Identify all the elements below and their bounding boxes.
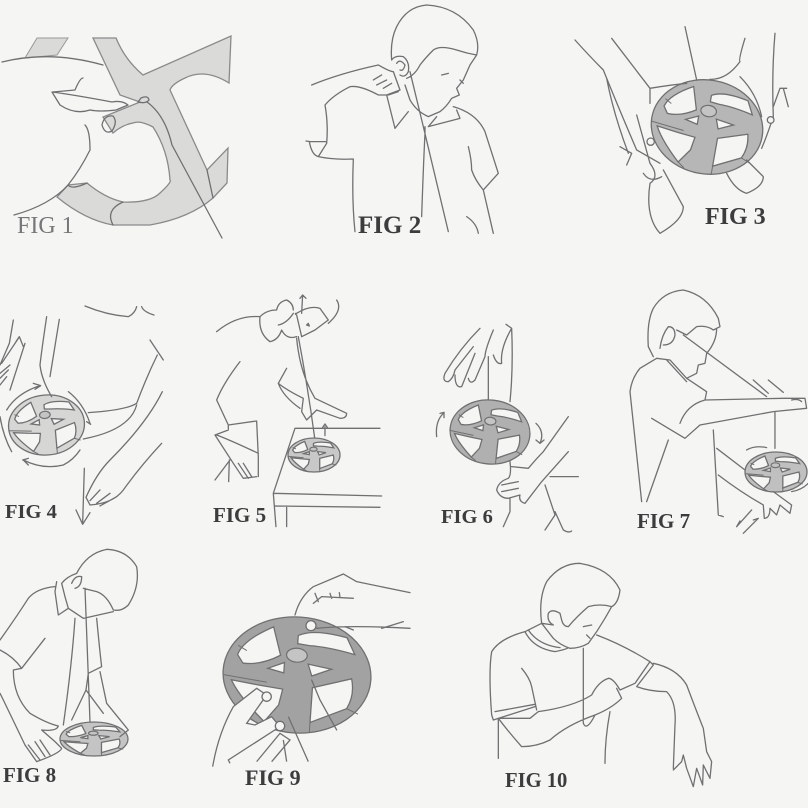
label FIG 6: FIG 6 — [441, 506, 493, 528]
label FIG 4: FIG 4 — [5, 501, 57, 523]
figure 9: holding wheel with both hands — [213, 574, 410, 790]
wheel on table — [288, 438, 340, 472]
label FIG 3: FIG 3 — [705, 204, 766, 230]
figure 8: man bent over wheel — [0, 549, 137, 787]
label FIG 7: FIG 7 — [637, 509, 690, 533]
figure 1: gripping the yo-yo edge — [2, 36, 231, 239]
label FIG 9: FIG 9 — [245, 765, 301, 790]
label FIG 8: FIG 8 — [3, 763, 56, 787]
label FIG 10: FIG 10 — [505, 770, 567, 792]
wheel — [644, 71, 770, 183]
figure 10: man with arm raised — [490, 563, 712, 792]
figure 4: wheel spinning at waist — [0, 306, 163, 524]
label FIG 1: FIG 1 — [17, 213, 74, 239]
label FIG 5: FIG 5 — [213, 503, 266, 527]
figure 2: man fastening string at collar — [306, 5, 498, 239]
figure 5: man at a table — [213, 295, 382, 527]
figure 7: man with outstretched arm — [630, 290, 808, 533]
figure 6: spinning wheel between hands — [436, 324, 578, 532]
label FIG 2: FIG 2 — [358, 212, 421, 239]
figure 3: both hands spinning the wheel — [575, 27, 788, 233]
